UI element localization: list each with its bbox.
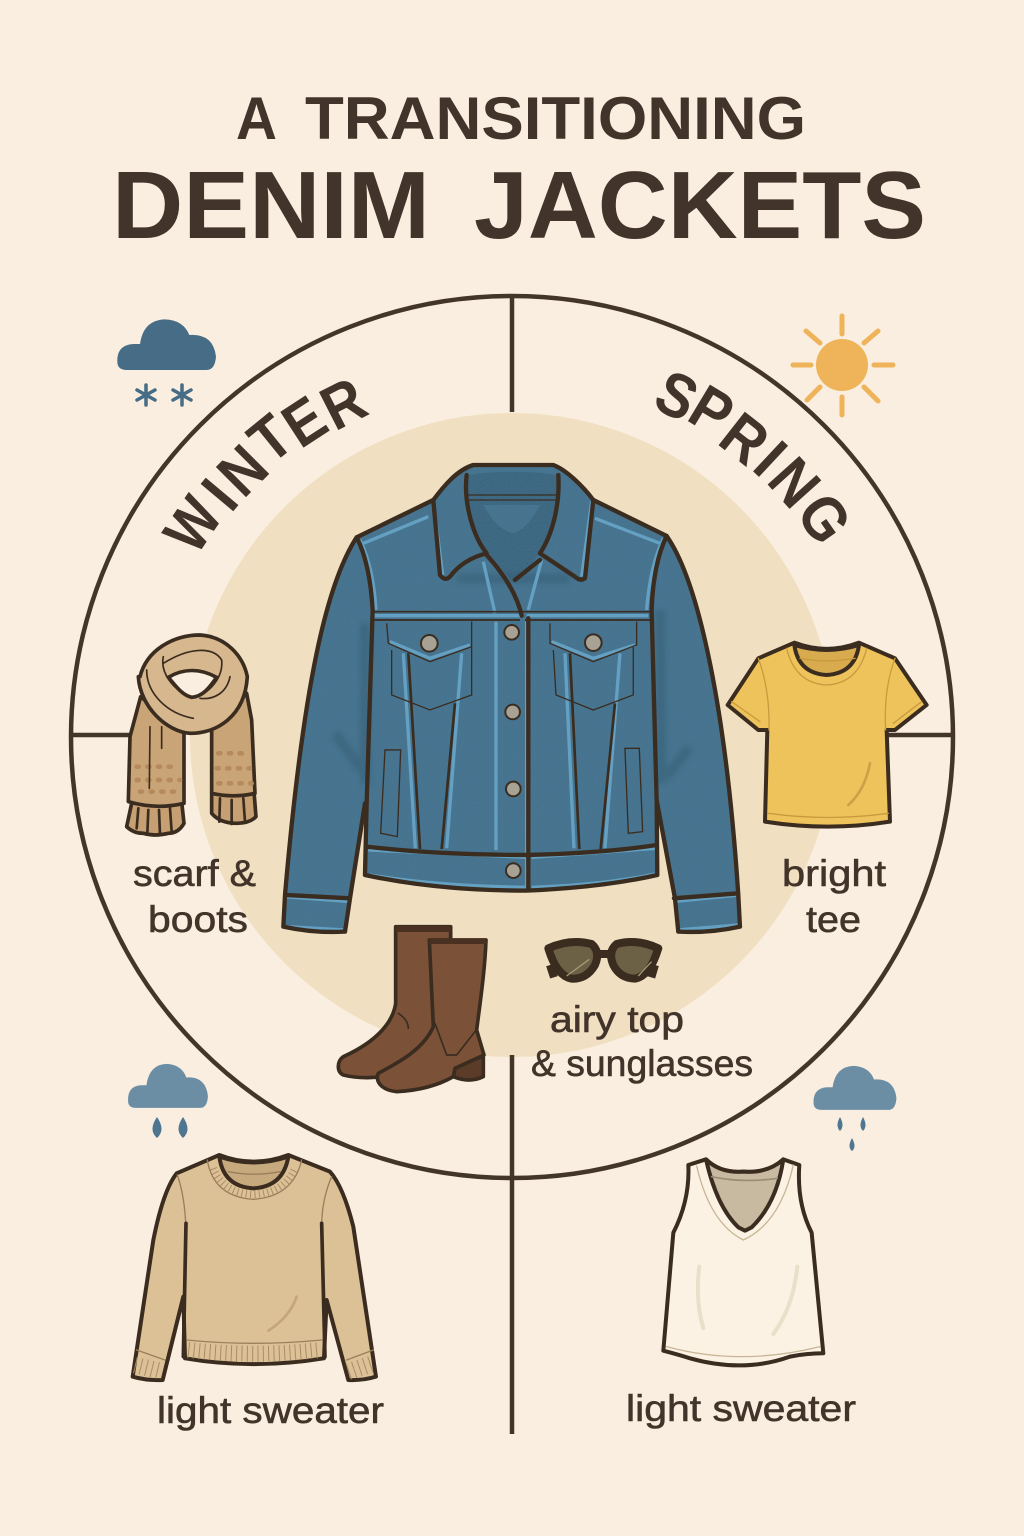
title (112, 85, 926, 259)
heading: winter: R (310, 365, 377, 444)
icon: rain cloud right (814, 1066, 896, 1151)
heading: spring (645, 357, 864, 556)
title: DENIM (112, 152, 430, 259)
heading: winter: E (271, 383, 339, 461)
heading: spring: S (645, 357, 708, 435)
label: airy top and sunglasses: & sunglasses (531, 1043, 753, 1084)
icon: snow cloud (117, 319, 216, 405)
label: scarf and boots (133, 853, 256, 940)
scarf illustration (127, 635, 256, 835)
title: A (236, 85, 277, 152)
title: JACKETS (474, 152, 926, 259)
heading: spring: N (755, 445, 833, 521)
label: bright tee: tee (806, 899, 861, 940)
label: airy top and sunglasses: airy top (550, 999, 684, 1040)
heading: winter: T (236, 402, 306, 476)
quadrant circle and dividers (70, 296, 955, 1434)
label: light sweater right: light sweater (626, 1388, 856, 1429)
label: airy top and sunglasses (531, 999, 753, 1084)
airy top illustration (663, 1159, 823, 1365)
light sweater illustration (133, 1155, 376, 1380)
heading: spring: P (678, 372, 745, 450)
icon: sun (793, 316, 893, 415)
denim jacket illustration (283, 465, 740, 932)
heading: winter (151, 365, 377, 565)
heading: spring: R (707, 400, 781, 479)
title: TRANSITIONING (305, 85, 806, 152)
heading: spring: I (741, 429, 799, 489)
heading: winter: I (189, 467, 251, 523)
bright tee illustration (728, 643, 927, 827)
heading: winter: N (205, 433, 281, 509)
boots illustration (338, 926, 486, 1092)
heading: winter: W (151, 484, 236, 565)
label: light sweater left: light sweater (157, 1390, 384, 1431)
central beige circle (190, 413, 834, 1057)
label: bright tee (782, 853, 887, 940)
label: scarf and boots: boots (148, 899, 248, 940)
label: bright tee: bright (782, 853, 887, 894)
label: scarf and boots: scarf & (133, 853, 256, 894)
sunglasses illustration (548, 942, 658, 979)
heading: spring: G (783, 481, 864, 556)
icon: rain cloud left (128, 1064, 208, 1138)
